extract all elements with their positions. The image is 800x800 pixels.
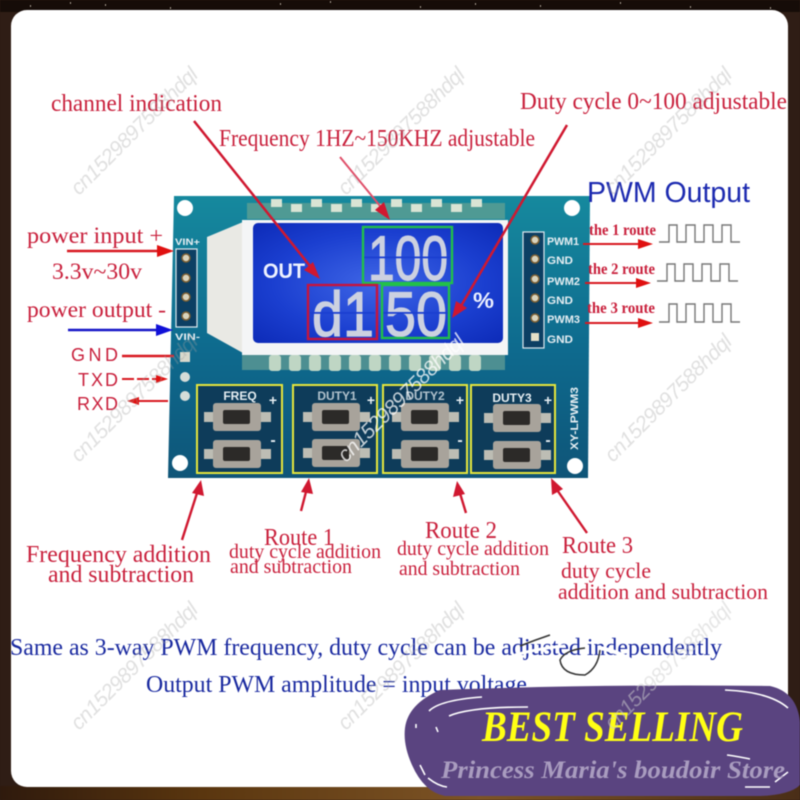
- right pin header: PWM3: [547, 314, 580, 326]
- caption: frequency buttons: Frequency addition: [26, 542, 211, 568]
- caption: route 3 buttons: Route 3: [562, 533, 633, 559]
- button group: DUTY2: +: [456, 392, 464, 408]
- button group: DUTY2: DUTY2: [405, 389, 445, 403]
- left pin header: VIN-: [175, 332, 200, 342]
- watermarks: cn1529897588hdql: [600, 329, 738, 467]
- right pin header: GND: [547, 334, 573, 346]
- heading: channel indication: channel indication: [51, 91, 222, 117]
- left pin header: [175, 237, 200, 401]
- button group: FREQ: -: [270, 432, 276, 449]
- output route 1: the 1 route: [589, 222, 656, 239]
- badge highlights: [416, 690, 788, 787]
- arrow: duty cycle: [452, 125, 567, 318]
- caption: frequency buttons: [26, 542, 211, 588]
- watermarks: cn1529897588hdql: [600, 62, 738, 200]
- scribble over text: [515, 635, 662, 696]
- caption: route 3 buttons: addition and subtraction: [558, 579, 768, 604]
- button group: DUTY3: DUTY3: [492, 391, 532, 405]
- button group: DUTY2: -: [457, 432, 463, 449]
- arrow: frequency buttons: [182, 480, 204, 540]
- red highlight: channel: [308, 285, 377, 339]
- caption: route 1 buttons: duty cycle addition: [229, 541, 381, 563]
- output route 2: [585, 261, 738, 288]
- button group: FREQ: +: [269, 392, 277, 408]
- right pin header: GND: [547, 295, 573, 307]
- arrow: GND: [122, 355, 174, 357]
- LCD white frame: [207, 220, 508, 355]
- watermarks: [66, 62, 738, 735]
- button group: DUTY3: +: [544, 392, 552, 408]
- watermarks: cn1529897588hdql: [66, 597, 204, 735]
- button group: DUTY3: [471, 385, 555, 473]
- arrow: TXD: [122, 375, 168, 383]
- watermarks: cn1529897588hdql: [66, 329, 204, 467]
- board model label: XY-LPWM3: [569, 387, 581, 450]
- caption: route 2 buttons: duty cycle addition: [397, 538, 549, 560]
- output route 2: the 2 route: [588, 261, 655, 278]
- green highlight: frequency: [363, 227, 452, 283]
- button group: DUTY2: [383, 385, 467, 473]
- label: power output: power output -: [27, 297, 166, 322]
- watermarks: cn1529897588hdql: [333, 597, 471, 735]
- LCD channel readout: d1: [312, 280, 374, 350]
- button group: FREQ: FREQ: [223, 389, 257, 403]
- badge body: [405, 686, 800, 796]
- mounting holes: [172, 200, 583, 474]
- label: power input: power input +: [27, 223, 163, 248]
- button group: DUTY1: +: [367, 392, 375, 408]
- watermarks: cn1529897588hdql: [333, 62, 471, 200]
- caption: route 2 buttons: and subtraction: [399, 558, 520, 580]
- watermarks: cn1529897588hdql: [333, 329, 471, 467]
- output route 3: the 3 route: [587, 300, 655, 317]
- caption: route 2 buttons: Route 2: [425, 518, 497, 544]
- arrow: route 3 buttons: [551, 478, 587, 533]
- right pin header: GND: [547, 255, 573, 267]
- output route 1: [583, 222, 740, 249]
- LCD duty readout: 50: [385, 280, 447, 350]
- output route 3: [585, 300, 740, 328]
- caption: route 1 buttons: [229, 525, 381, 578]
- arrow: frequency: [340, 157, 390, 220]
- caption: frequency buttons: and subtraction: [48, 562, 194, 588]
- heading: duty cycle range: Duty cycle 0~100 adjustable: [520, 89, 787, 115]
- button group: DUTY1: DUTY1: [317, 389, 357, 403]
- label: GND: GND: [71, 345, 118, 365]
- caption: route 1 buttons: Route 1: [264, 525, 334, 551]
- heading: PWM Output: PWM Output: [587, 177, 750, 209]
- caption: route 1 buttons: and subtraction: [230, 556, 352, 578]
- LCD blue screen: [253, 223, 503, 343]
- button group: DUTY1: [293, 385, 377, 473]
- label: voltage range: 3.3v~30v: [52, 259, 143, 284]
- arrow: power output: [68, 324, 173, 336]
- watermarks: cn1529897588hdql: [600, 597, 738, 735]
- button group: FREQ: [197, 385, 282, 473]
- right pin header: [523, 232, 580, 348]
- board substrate: [168, 196, 590, 478]
- green highlight: duty: [382, 285, 449, 338]
- LCD frequency readout: 100: [368, 224, 448, 294]
- left pin header: VIN+: [175, 237, 200, 247]
- right pin header: PWM1: [547, 236, 579, 248]
- LCD top ribbon connector: [247, 199, 505, 219]
- LCD OUT label: OUT: [263, 260, 305, 283]
- LCD bottom ribbon connector: [242, 350, 505, 371]
- caption: route 3 buttons: duty cycle: [561, 558, 651, 583]
- button group: DUTY3: -: [545, 432, 551, 449]
- arrow: route 2 buttons: [453, 481, 466, 513]
- arrow: power input: [67, 245, 174, 257]
- arrow: RXD: [127, 397, 168, 405]
- best selling badge: [405, 686, 800, 796]
- heading: frequency range: Frequency 1HZ~150KHZ adjustable: [219, 126, 535, 152]
- label: RXD: RXD: [77, 394, 118, 414]
- label: TXD: TXD: [78, 370, 118, 390]
- right pin header: PWM2: [547, 276, 580, 288]
- arrow: route 1 buttons: [301, 478, 313, 511]
- badge title: BEST SELLING: [481, 704, 743, 751]
- LCD percent sign: %: [473, 288, 494, 313]
- caption: route 3 buttons: [558, 533, 768, 604]
- circuit board: [168, 196, 590, 478]
- description line 1: Same as 3-way PWM frequency, duty cycle can be adjusted independently: [10, 635, 722, 661]
- description line 2: Output PWM amplitude = input voltage: [146, 672, 527, 698]
- badge store name: Princess Maria's boudoir Store: [440, 757, 785, 784]
- watermarks: cn1529897588hdql: [66, 62, 204, 200]
- arrow: channel indication: [194, 121, 320, 279]
- caption: route 2 buttons: [397, 518, 549, 580]
